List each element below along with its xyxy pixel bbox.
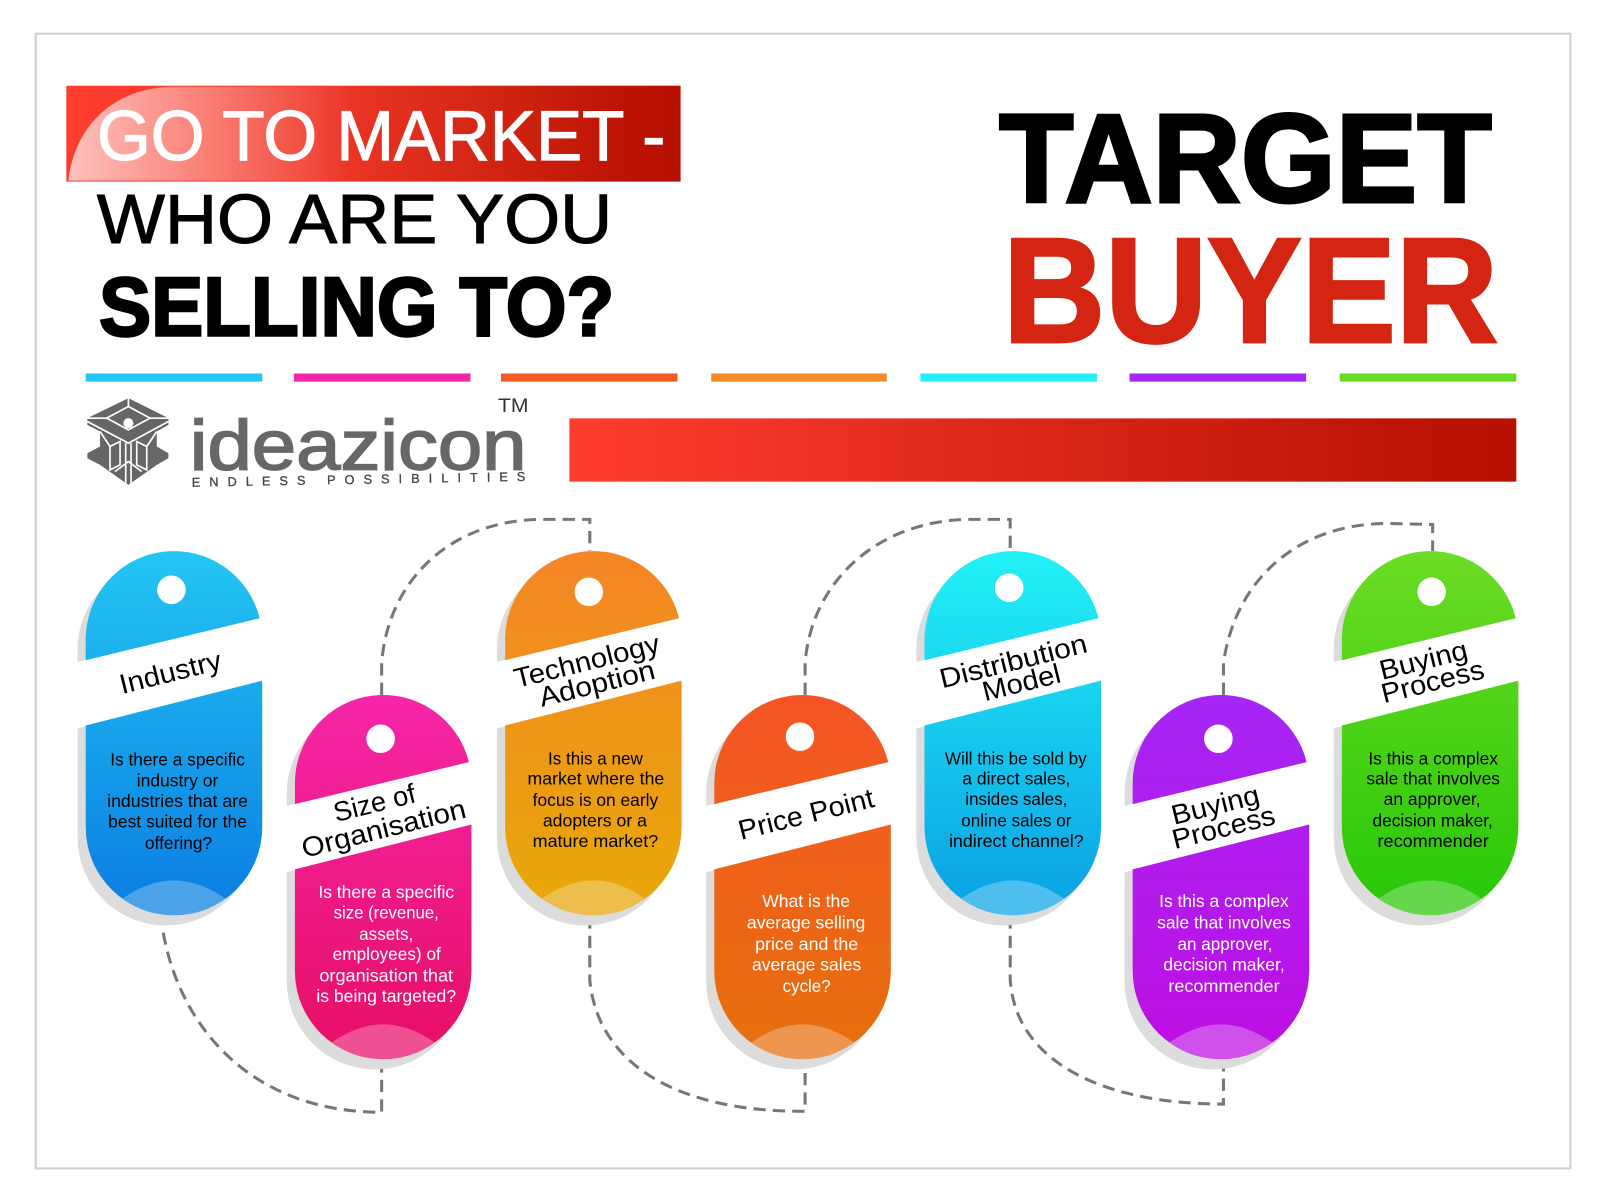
panel: industry tag	[77, 551, 264, 926]
tag description: Is this a complex	[1159, 891, 1289, 911]
logo: ideazicon: ideazicon	[190, 405, 527, 484]
panel: distribution model tag	[915, 551, 1103, 926]
tag title: Price Point	[735, 782, 877, 846]
tag description: mature market?	[533, 831, 658, 851]
dashed connectors	[163, 519, 1433, 1112]
tag description: employees) of	[333, 944, 441, 964]
panel: technology adoption tag	[496, 551, 684, 926]
tag description: Is this a complex	[1368, 748, 1498, 768]
tag description: an approver,	[1178, 934, 1272, 954]
tag description: offering?	[145, 833, 212, 853]
tag description: assets,	[359, 924, 413, 944]
panel: buying process tag (purple)	[1123, 695, 1311, 1069]
icon: logo mark	[87, 398, 168, 485]
tag description: What is the	[762, 891, 850, 911]
title banner: go to market: GO TO MARKET -	[97, 96, 665, 175]
heading: buyer: BUYER	[1003, 207, 1498, 374]
tag description: decision maker,	[1163, 954, 1285, 974]
tag description	[945, 748, 1087, 851]
tag description: is being targeted?	[316, 986, 456, 1006]
tag description: recommender	[1378, 831, 1489, 851]
tag description: market where the	[528, 769, 664, 789]
tag title: Organisation	[298, 793, 469, 864]
tag description	[528, 748, 664, 851]
panel: buying process tag (green)	[1333, 551, 1520, 926]
tag description: Is this a new	[548, 748, 643, 768]
tag description: price and the	[755, 934, 858, 954]
tag description: insides sales,	[965, 789, 1067, 809]
tag description: a direct sales,	[962, 769, 1070, 789]
panel: size of organisation tag	[286, 695, 473, 1069]
tag description: indirect channel?	[949, 831, 1084, 851]
tag description: online sales or	[961, 811, 1071, 831]
tag title: Distribution	[936, 628, 1090, 694]
tag description: best suited for the	[108, 812, 247, 832]
panel: price point tag	[705, 695, 893, 1069]
tag description: industry or	[137, 771, 218, 791]
tag description: sale that involves	[1366, 769, 1500, 789]
tag description	[747, 891, 865, 996]
tag title: Process	[1378, 654, 1487, 709]
tag title: Size of	[330, 778, 419, 828]
tag title: Adoption	[536, 654, 658, 713]
tag title: Industry	[116, 644, 225, 700]
tag description: average selling	[747, 913, 865, 933]
tag description	[316, 882, 456, 1006]
tag description: cycle?	[783, 976, 831, 996]
tag description: Is there a specific	[318, 882, 454, 902]
heading: target: TARGET	[999, 87, 1492, 229]
tag description	[1366, 748, 1500, 851]
logo: ideazicon: TM	[498, 395, 529, 417]
tag description: decision maker,	[1372, 811, 1493, 831]
tag description: focus is on early	[533, 790, 658, 810]
logo: ideazicon: ENDLESS POSSIBILITIES	[192, 469, 526, 490]
tag description: industries that are	[107, 791, 248, 811]
heading: selling to: SELLING TO?	[99, 260, 614, 354]
logo: ideazicon	[87, 395, 529, 490]
tag title: Process	[1169, 799, 1278, 855]
tag title: Technology	[511, 628, 663, 694]
tag description: recommender	[1168, 976, 1280, 996]
tag description: average sales	[752, 954, 861, 974]
red gradient bar	[569, 418, 1516, 482]
colour bars row	[86, 373, 1516, 382]
tag title: Buying	[1376, 634, 1471, 686]
tag description: Will this be sold by	[945, 748, 1087, 768]
tag description: organisation that	[319, 966, 453, 986]
tag title: Model	[979, 658, 1064, 707]
tag title	[1376, 634, 1487, 709]
tag title	[1168, 779, 1278, 855]
heading: who are you: WHO ARE YOU	[97, 180, 612, 258]
tag description	[1157, 891, 1291, 996]
tag description: adopters or a	[543, 811, 647, 831]
tag description: Is there a specific	[110, 749, 245, 769]
tag description	[107, 749, 248, 853]
tag title: Buying	[1168, 779, 1263, 831]
tag description: an approver,	[1384, 789, 1481, 809]
tag description: size (revenue,	[334, 902, 439, 922]
tag description: sale that involves	[1157, 913, 1291, 933]
